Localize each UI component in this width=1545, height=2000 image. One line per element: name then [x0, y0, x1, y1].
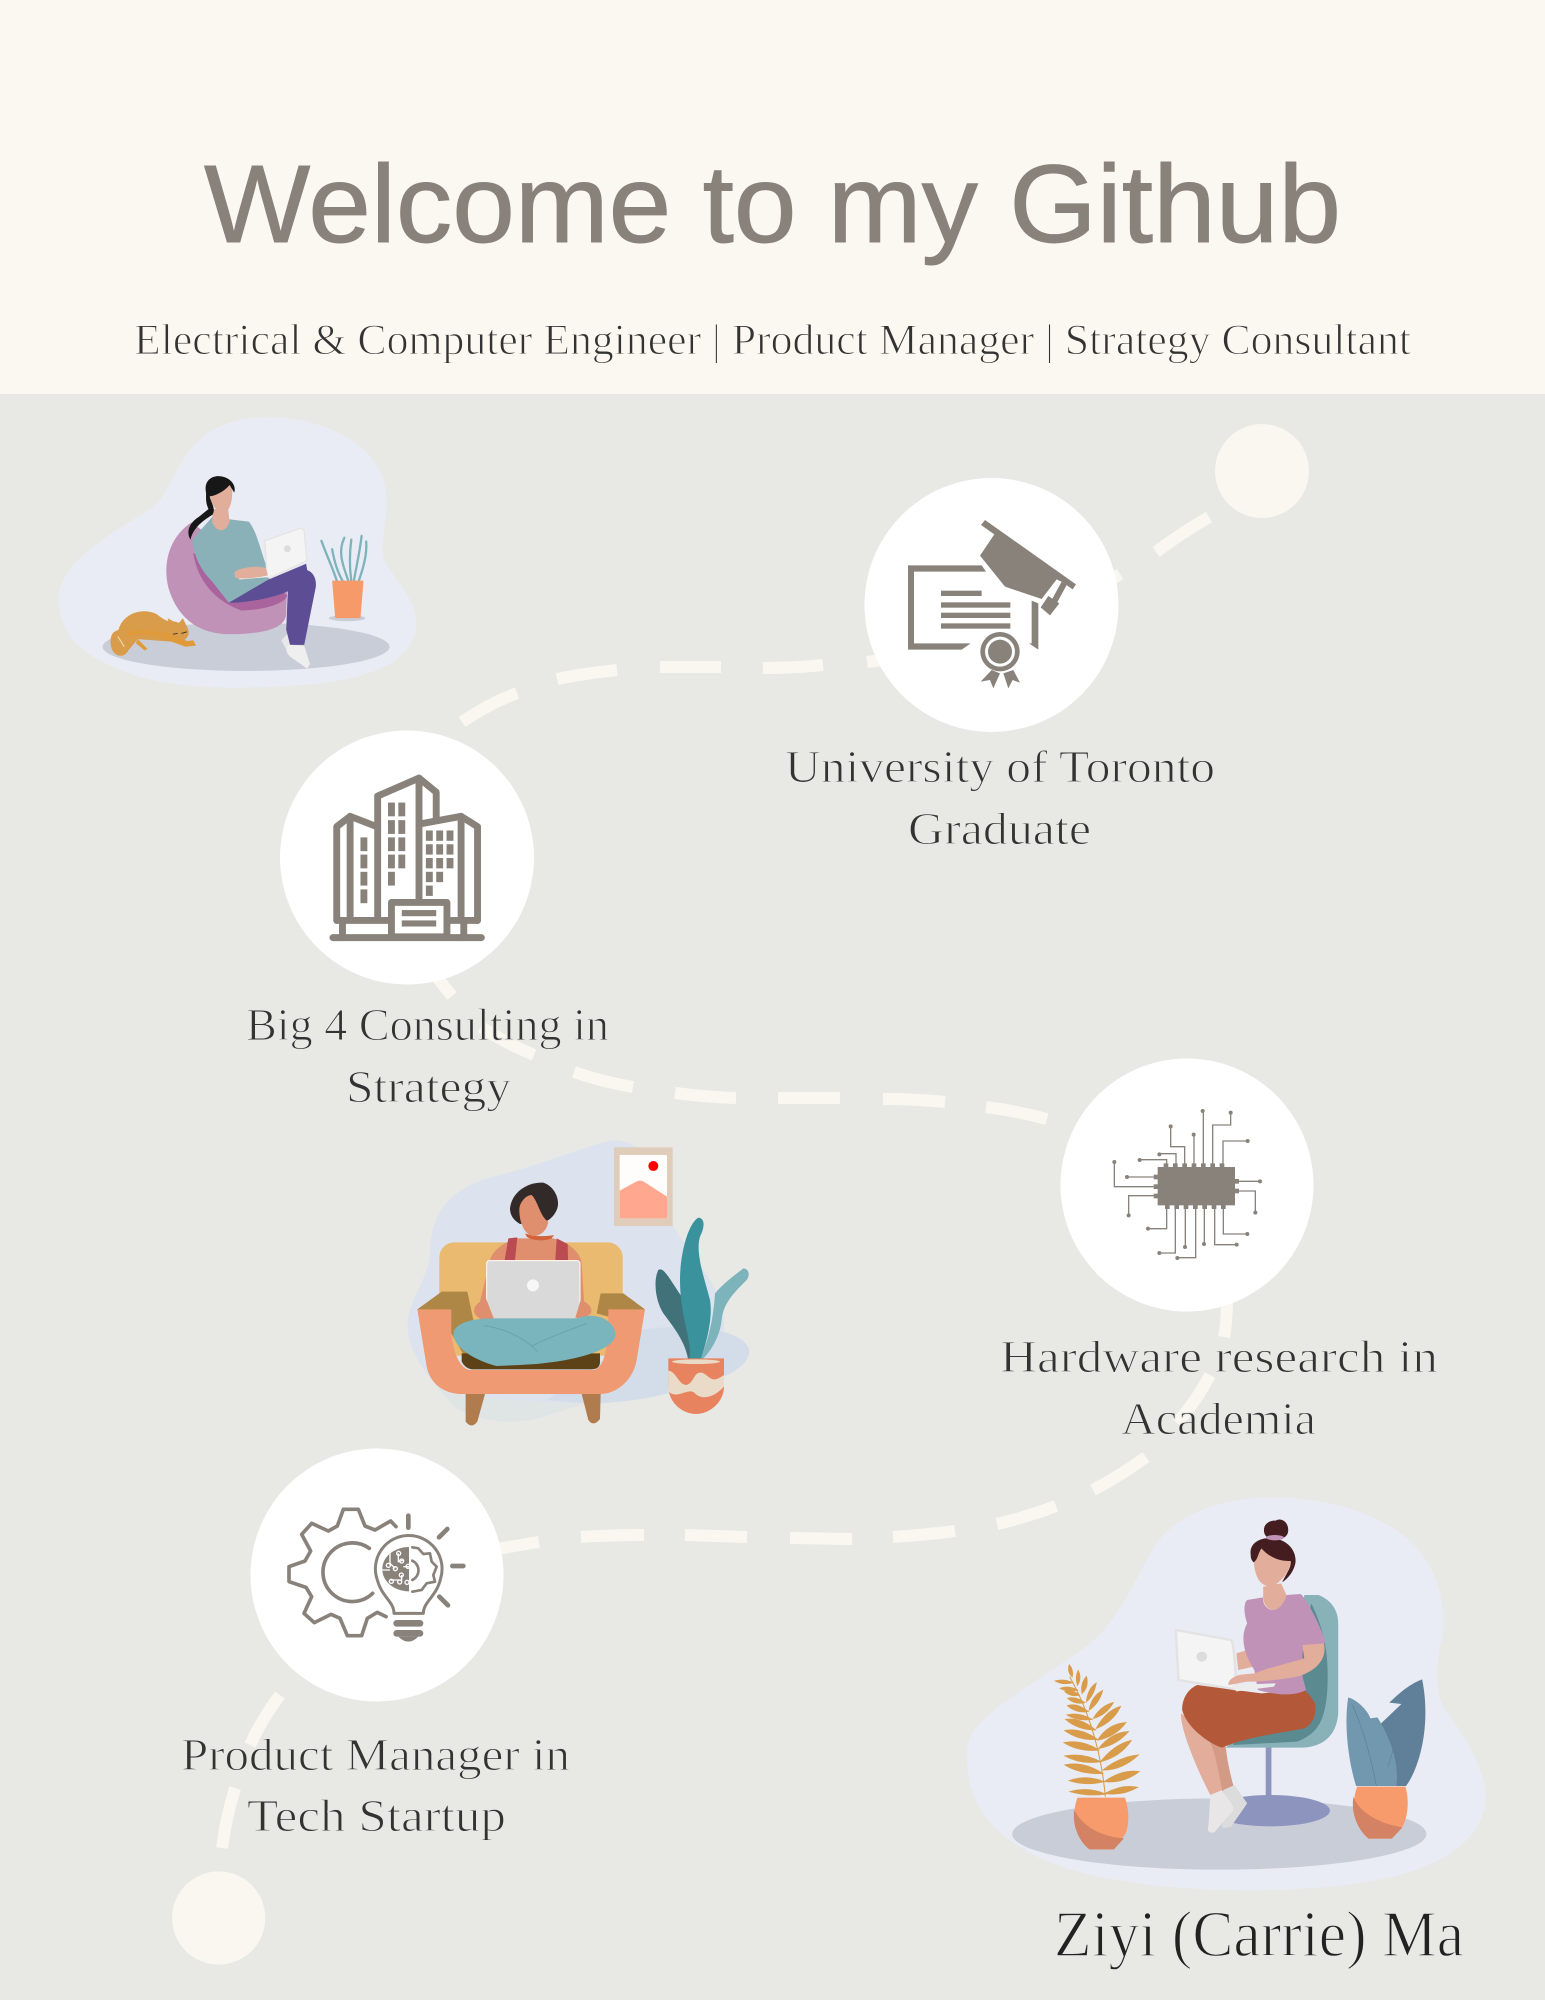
- back arm: [1236, 1650, 1254, 1670]
- step circle: hardware: [1060, 1058, 1314, 1312]
- pants: [229, 564, 316, 645]
- skirt: [1182, 1685, 1316, 1748]
- face: [1254, 1545, 1292, 1587]
- icon: graduation cap and certificate: [908, 520, 1076, 688]
- label: hardware: [1000, 1332, 1438, 1444]
- hair: [1251, 1538, 1296, 1582]
- chair body: [417, 1309, 645, 1394]
- path end dot: [172, 1871, 265, 1965]
- hands: [234, 567, 268, 578]
- hair bun: [1264, 1520, 1288, 1539]
- illustration: woman on chair with plants: [967, 1497, 1486, 1890]
- floor: [103, 623, 390, 671]
- hair: [510, 1183, 558, 1224]
- blob backdrop: [59, 417, 416, 688]
- legs: [453, 1316, 615, 1366]
- illustration: woman on beanbag with cat: [59, 417, 416, 688]
- plant main leaf: [680, 1218, 711, 1362]
- icon: gear and lightbulb: [289, 1509, 463, 1642]
- neck: [1263, 1583, 1286, 1610]
- plant light leaf: [700, 1268, 749, 1362]
- cat: [110, 611, 196, 656]
- header band: [0, 0, 1545, 394]
- leafy plant back leaf: [1381, 1679, 1425, 1786]
- blob backdrop: [408, 1140, 724, 1422]
- neck: [212, 509, 230, 530]
- shirt: [192, 517, 272, 603]
- chair back: [439, 1242, 623, 1356]
- plant: [321, 536, 366, 581]
- near leg: [1181, 1713, 1222, 1795]
- chair legs: [466, 1394, 485, 1425]
- leafy plant pot: [1354, 1787, 1408, 1839]
- sock back: [281, 633, 297, 651]
- icon: microchip: [1112, 1109, 1262, 1260]
- label: consulting: Strategy: [346, 1062, 512, 1112]
- illustration: person in armchair: [408, 1140, 749, 1425]
- label: product manager: Product Manager in: [181, 1730, 570, 1780]
- plant dark leaf: [656, 1269, 694, 1362]
- face: [519, 1195, 548, 1236]
- step circle: university: [864, 478, 1118, 732]
- dashed career path: [222, 517, 1227, 1848]
- label: university: University of Toronto: [785, 742, 1215, 792]
- sock front: [286, 645, 310, 669]
- arm: [1228, 1643, 1325, 1685]
- step circle: product manager: [250, 1448, 504, 1702]
- plant saucer: [329, 615, 365, 621]
- label: product manager: Tech Startup: [247, 1791, 506, 1841]
- label: product manager: [181, 1730, 570, 1841]
- laptop: [487, 1261, 580, 1319]
- laptop: [265, 528, 307, 577]
- chair arm tops: [417, 1292, 473, 1360]
- scarf: [525, 1233, 554, 1240]
- plant pot: [332, 581, 364, 618]
- picture frame: [614, 1147, 673, 1226]
- label: consulting: [246, 1000, 609, 1112]
- hair: [188, 476, 235, 540]
- author name: Ziyi (Carrie) Ma: [1054, 1898, 1464, 1971]
- floor shadow: [547, 1327, 749, 1403]
- beanbag: [166, 522, 287, 634]
- fern pot: [1074, 1798, 1128, 1849]
- far leg: [1204, 1733, 1234, 1792]
- label: consulting: Big 4 Consulting in: [246, 1000, 609, 1050]
- label: hardware: Academia: [1121, 1394, 1316, 1444]
- leafy plant front leaf: [1346, 1697, 1397, 1786]
- subtitle: Electrical & Computer Engineer | Product Manager | Strategy Consultant: [134, 317, 1411, 364]
- path start dot: [1215, 424, 1309, 518]
- fern: [1055, 1665, 1139, 1797]
- torso: [480, 1238, 584, 1302]
- title: Welcome to my Github: [204, 143, 1341, 266]
- chair shell: [1226, 1595, 1338, 1748]
- shirt: [1243, 1594, 1326, 1694]
- icon: office buildings: [333, 778, 481, 938]
- floor: [1012, 1798, 1426, 1870]
- chair base: [1211, 1795, 1330, 1826]
- near sock: [1208, 1791, 1234, 1833]
- label: university: Graduate: [908, 804, 1091, 854]
- laptop: [1176, 1630, 1236, 1689]
- label: hardware: Hardware research in: [1000, 1332, 1438, 1382]
- seat: [462, 1353, 600, 1369]
- far sock: [1222, 1785, 1247, 1828]
- face: [210, 482, 232, 513]
- straps: [505, 1237, 517, 1260]
- blob backdrop: [967, 1497, 1486, 1890]
- step circle: consulting: [280, 730, 534, 984]
- hands: [474, 1298, 494, 1321]
- label: university: [785, 742, 1215, 854]
- plant pot: [668, 1358, 724, 1414]
